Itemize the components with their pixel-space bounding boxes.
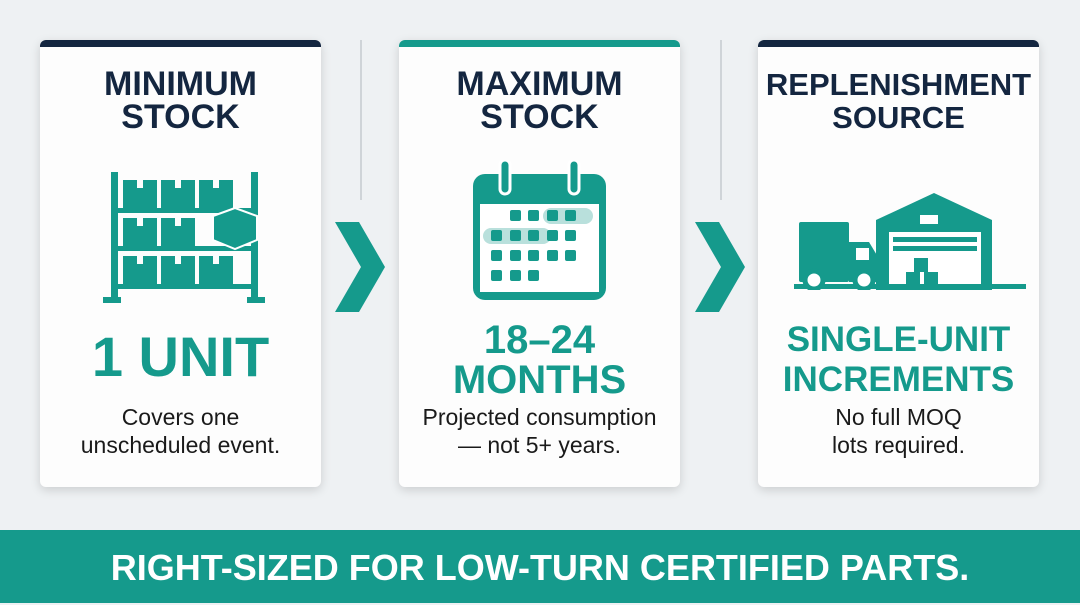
big value: MONTHS	[453, 358, 626, 402]
big value: 18–24	[484, 318, 595, 362]
icon: shelf with boxes	[103, 172, 265, 303]
heading: minimum stock: MINIMUM	[104, 65, 257, 103]
text block: lots required.	[832, 432, 965, 458]
heading: minimum stock: STOCK	[121, 98, 240, 136]
big value	[783, 320, 1014, 399]
text block: No full MOQ	[835, 404, 962, 430]
heading: minimum stock	[104, 65, 257, 136]
arrow 1	[335, 222, 385, 312]
big value: SINGLE-UNIT	[787, 320, 1010, 359]
text block: unscheduled event.	[81, 432, 280, 458]
banner: RIGHT-SIZED FOR LOW-TURN CERTIFIED PARTS.	[111, 547, 969, 588]
text block: Covers one	[122, 404, 239, 430]
icon: truck and warehouse	[794, 193, 1026, 290]
text block: Projected consumption	[423, 404, 656, 430]
text block: — not 5+ years.	[458, 432, 621, 458]
panel: maximum stock	[399, 40, 680, 487]
text block	[423, 404, 656, 458]
heading: replenishment source: REPLENISHMENT	[766, 67, 1031, 102]
heading: replenishment source: SOURCE	[832, 100, 965, 135]
big value: 1 UNIT	[92, 325, 269, 388]
icon: calendar	[473, 162, 606, 300]
banner	[0, 530, 1080, 603]
heading: maximum stock	[456, 65, 623, 136]
text block	[832, 404, 965, 458]
text block	[81, 404, 280, 458]
heading: replenishment source	[766, 67, 1031, 135]
heading: maximum stock: MAXIMUM	[456, 65, 623, 103]
big value: INCREMENTS	[783, 360, 1014, 399]
heading: maximum stock: STOCK	[480, 98, 599, 136]
arrow 2	[695, 222, 745, 312]
panel: replenishment source	[758, 40, 1039, 487]
big value	[453, 318, 626, 402]
panel: minimum stock	[40, 40, 321, 487]
